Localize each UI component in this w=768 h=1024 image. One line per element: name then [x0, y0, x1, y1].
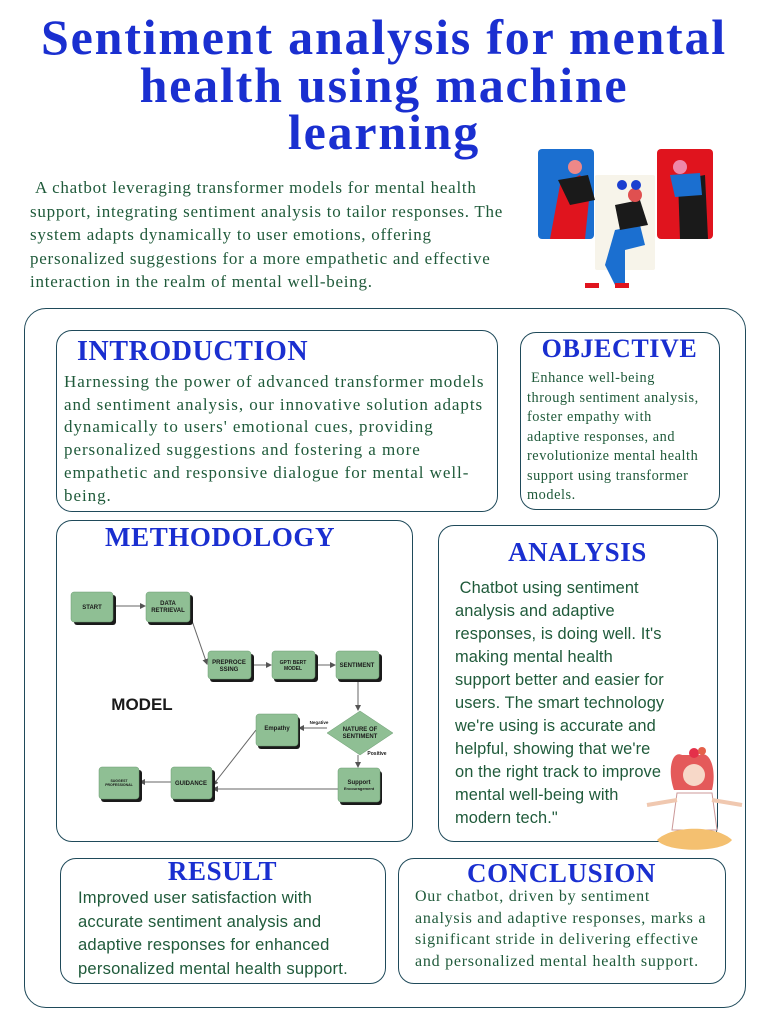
flowchart: Support: [348, 780, 370, 786]
text: analysis: we're using is accurate and: [455, 717, 656, 735]
text: analysis: making mental health: [455, 648, 613, 666]
text: conclusion: [415, 888, 706, 970]
text: conclusion: and personalized mental health support.: [415, 952, 699, 970]
text: conclusion: analysis and adaptive responses, marks a: [415, 910, 706, 926]
heading: introduction: INTRODUCTION: [77, 336, 308, 367]
title: learning: [288, 104, 480, 160]
text: result: [78, 888, 348, 978]
text: objective: support using transformer: [527, 468, 688, 484]
illustration: video call people: [538, 149, 713, 288]
flowchart: MODEL: [111, 695, 173, 714]
text: analysis: analysis and adaptive: [455, 602, 615, 620]
text: introduction: dynamically to users' emotional cues, providing: [64, 417, 434, 436]
text: analysis: responses, is doing well. It's: [455, 625, 662, 643]
heading: analysis: ANALYSIS: [508, 537, 647, 567]
flowchart: PROFESSIONAL: [105, 783, 134, 787]
text: result: adaptive responses for enhanced: [78, 935, 330, 954]
text: analysis: Chatbot using sentiment: [460, 579, 639, 597]
flowchart: Positive: [367, 751, 387, 757]
intro paragraph: interaction in the realm of mental well-being.: [30, 272, 373, 291]
flowchart: RETRIEVAL: [151, 608, 185, 614]
text: analysis: mental well-being with: [455, 786, 618, 804]
text: analysis: [455, 579, 664, 827]
flowchart: DATA: [160, 601, 177, 607]
flowchart: Negative: [310, 720, 329, 725]
intro paragraph: system adapts dynamically to user emotions, offering: [30, 225, 432, 244]
text: objective: revolutionize mental health: [527, 448, 698, 464]
text: introduction: being.: [64, 486, 112, 505]
panel: objective: [520, 332, 720, 510]
flowchart: GUIDANCE: [175, 781, 207, 787]
text: objective: adaptive responses, and: [527, 428, 675, 444]
text: result: accurate sentiment analysis and: [78, 912, 321, 930]
panel: result: [60, 858, 386, 984]
heading: result: RESULT: [168, 856, 277, 886]
panel: methodology: [56, 520, 413, 842]
title: health using machine: [140, 56, 628, 112]
text: analysis: modern tech.": [455, 809, 558, 827]
panel: analysis: [438, 525, 718, 842]
intro paragraph: support, integrating sentiment analysis to tailor responses. The: [30, 202, 503, 220]
text: analysis: users. The smart technology: [455, 694, 664, 712]
flowchart: MODEL: [284, 666, 302, 672]
flowchart: START: [82, 605, 102, 611]
text: introduction: and sentiment analysis, our innovative solution adapts: [64, 395, 483, 414]
flowchart: NATURE OF: [343, 727, 378, 733]
intro paragraph: [30, 178, 503, 291]
flowchart: SENTIMENT: [343, 734, 378, 740]
text: conclusion: significant stride in delivering effective: [415, 931, 699, 948]
text: introduction: [64, 372, 484, 505]
text: analysis: helpful, showing that we're: [455, 740, 650, 758]
intro paragraph: A chatbot leveraging transformer models for mental health: [35, 178, 477, 197]
text: conclusion: Our chatbot, driven by sentiment: [415, 888, 650, 905]
heading: methodology: METHODOLOGY: [105, 522, 335, 552]
text: introduction: Harnessing the power of advanced transformer models: [64, 372, 484, 391]
text: objective: through sentiment analysis,: [527, 390, 699, 406]
heading: objective: OBJECTIVE: [542, 334, 697, 363]
flowchart: GPT/ BERT: [280, 660, 306, 666]
text: objective: Enhance well-being: [531, 370, 655, 386]
flowchart: SUGGEST: [110, 779, 128, 783]
text: introduction: empathetic and responsive dialogue for mental well-: [64, 463, 469, 482]
flowchart: Empathy: [264, 726, 290, 732]
heading: conclusion: CONCLUSION: [467, 858, 656, 888]
flowchart: PREPROCE: [212, 660, 246, 666]
title: [41, 9, 727, 160]
flowchart: SSING: [220, 667, 239, 673]
outer frame: [24, 308, 746, 1008]
illustration: meditating girl: [646, 747, 742, 850]
text: result: Improved user satisfaction with: [78, 888, 312, 907]
text: introduction: personalized suggestions and fostering a more: [64, 440, 421, 459]
text: objective: foster empathy with: [527, 409, 652, 425]
panel: introduction: [56, 330, 498, 512]
text: objective: models.: [527, 487, 576, 503]
flowchart: SENTIMENT: [340, 663, 375, 669]
flowchart: Encouragement: [344, 786, 375, 791]
panel: conclusion: [398, 858, 726, 984]
text: objective: [527, 370, 699, 503]
text: analysis: on the right track to improve: [455, 763, 661, 781]
title: Sentiment analysis for mental: [41, 9, 727, 65]
text: result: personalized mental health support.: [78, 958, 348, 978]
text: analysis: support better and easier for: [455, 671, 664, 689]
intro paragraph: personalized suggestions for a more empathetic and effective: [30, 248, 491, 268]
